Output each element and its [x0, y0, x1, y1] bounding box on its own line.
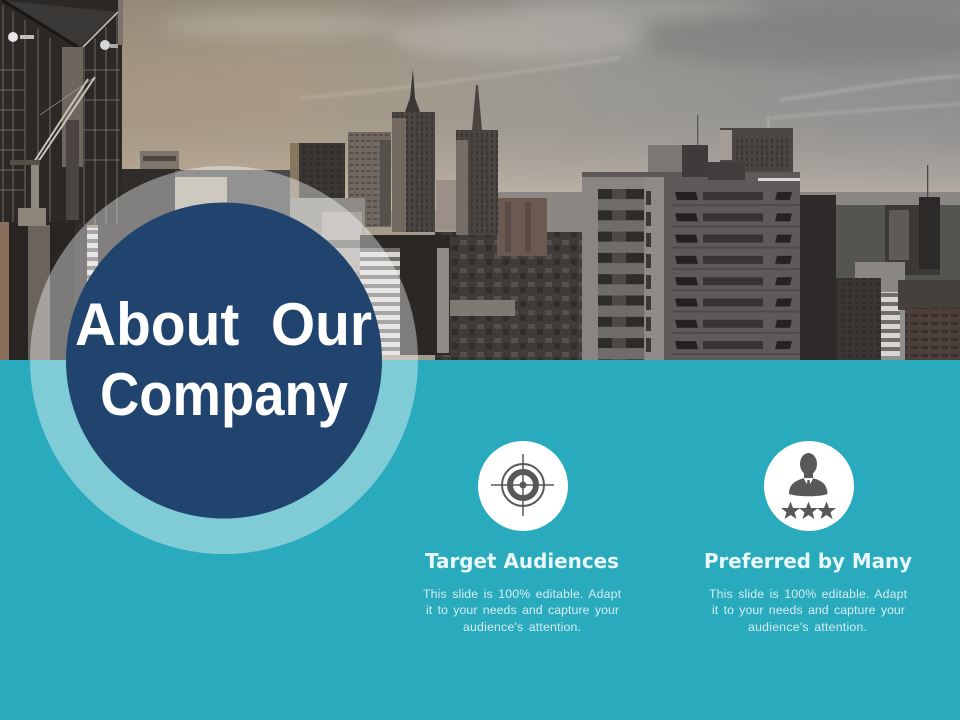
text block: Target Audiences description: This slide is 100% editable. Adapt — [423, 587, 622, 601]
title — [75, 291, 372, 428]
far towers — [497, 198, 547, 256]
horizon hills — [498, 192, 960, 215]
icon: person with three stars — [764, 441, 854, 531]
text block: Preferred by Many description: audience's attention. — [748, 620, 867, 634]
main building — [582, 172, 645, 360]
mid-left buildings — [75, 169, 180, 308]
text block: Preferred by Many description — [709, 587, 908, 634]
right bottom buildings — [885, 205, 940, 275]
heading: Target Audiences: Target Audiences — [425, 549, 619, 573]
title: About Our — [75, 291, 372, 358]
striped building — [360, 235, 450, 355]
text block: Preferred by Many description: it to your needs and capture your — [712, 603, 905, 617]
icon: target — [478, 441, 568, 531]
foreground left block — [9, 222, 75, 360]
navy title circle — [66, 202, 382, 518]
left tower — [0, 0, 122, 225]
title: Company — [100, 361, 349, 428]
text block: Preferred by Many description: This slide is 100% editable. Adapt — [709, 587, 908, 601]
trees — [836, 205, 960, 280]
outer translucent ring — [30, 166, 418, 554]
heading: Preferred by Many: Preferred by Many — [704, 549, 912, 573]
bank logos — [8, 32, 18, 42]
city skyline photo — [0, 0, 960, 360]
rear office block — [720, 128, 793, 172]
text block: Target Audiences description: it to your needs and capture your — [426, 603, 619, 617]
text block: Target Audiences description — [423, 587, 622, 634]
text block: Target Audiences description: audience's attention. — [463, 620, 581, 634]
crane — [34, 77, 95, 162]
low city mass — [435, 232, 585, 360]
